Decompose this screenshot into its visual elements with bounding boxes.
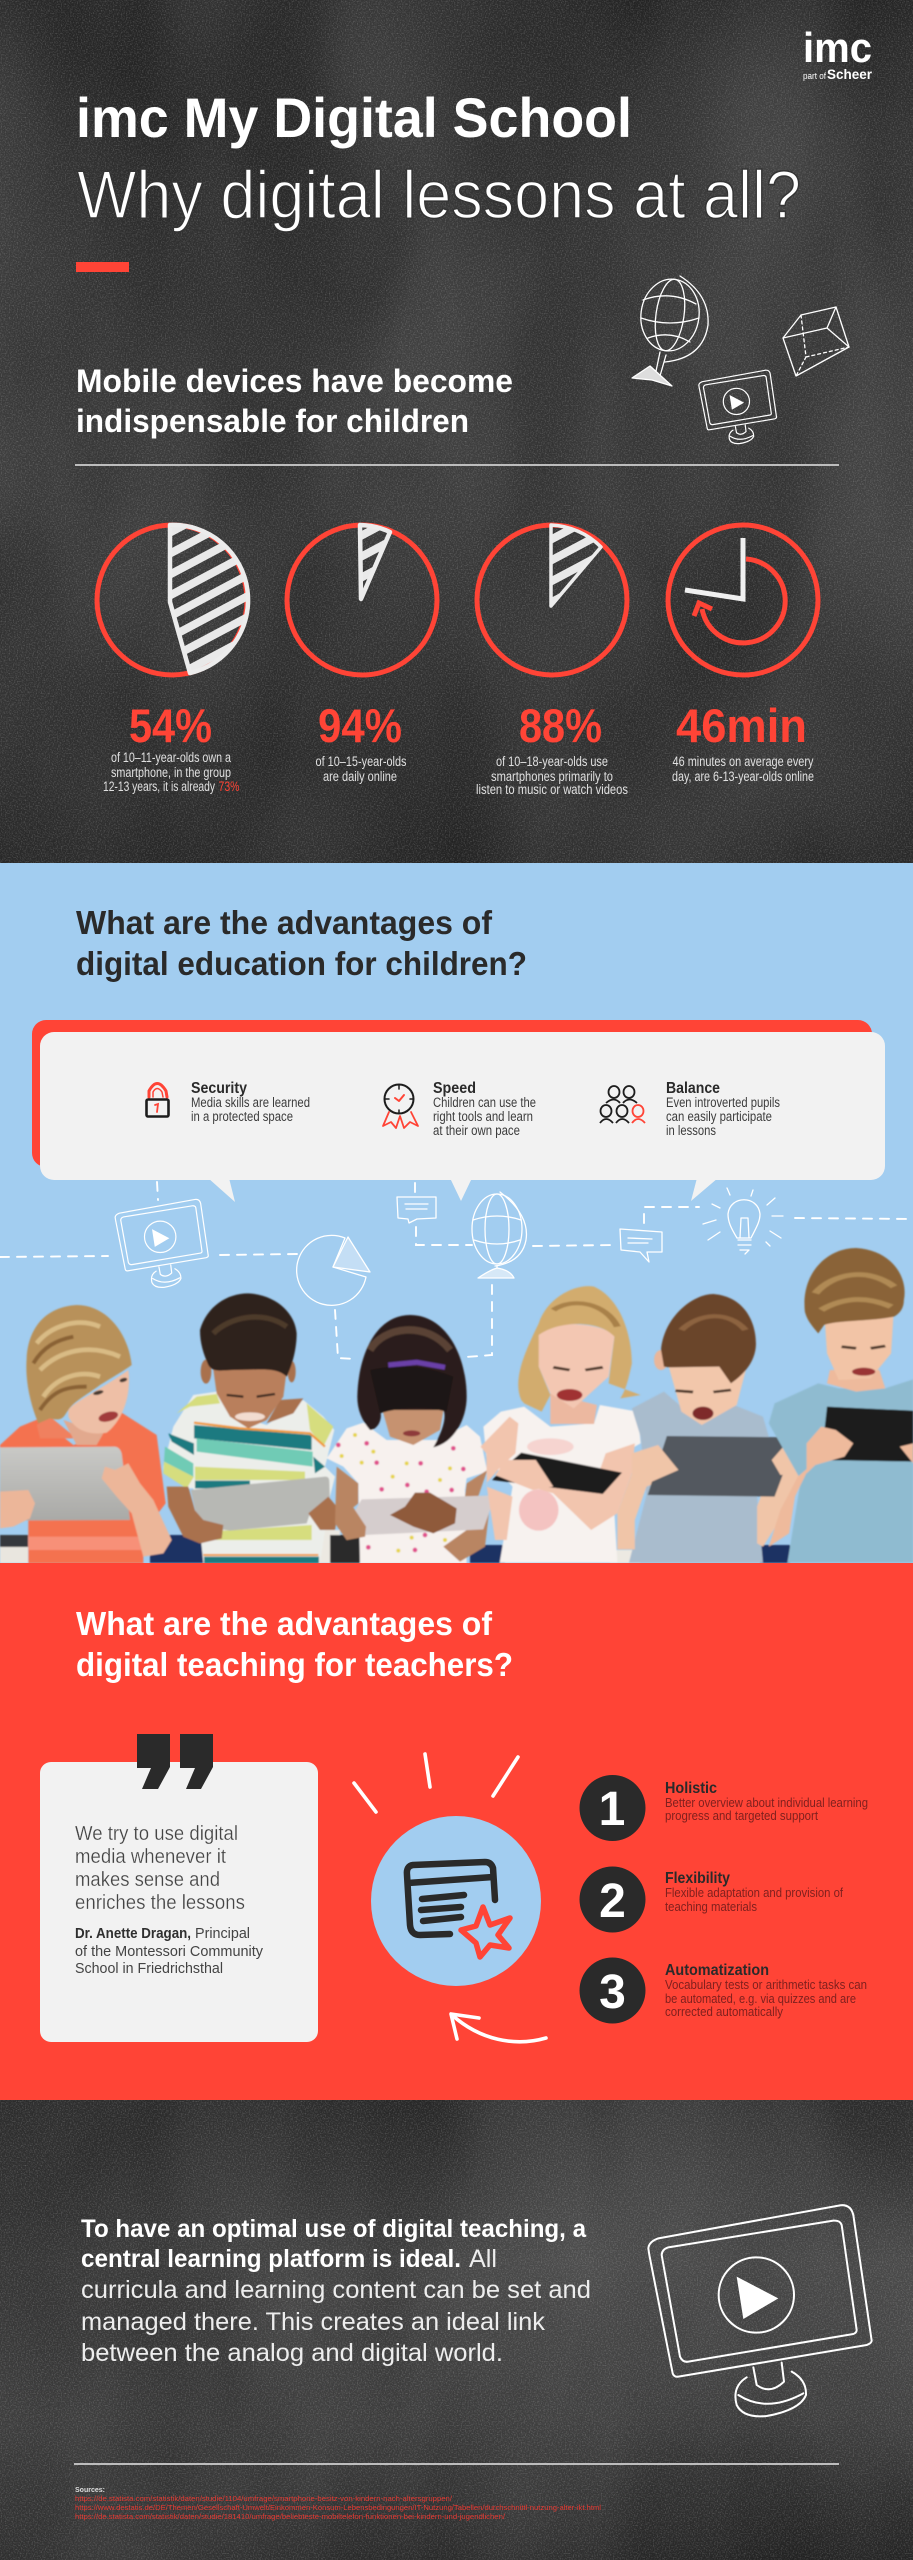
text: quote: We try to use digital: [75, 1823, 238, 1845]
item: automatization: be automated, e.g. via quizzes and are: [665, 1992, 856, 2006]
stat: 94%: are daily online: [323, 769, 397, 784]
icon: chalk monitor with play button: [699, 370, 777, 444]
arrow: curved chalk arrow: [451, 2014, 546, 2042]
icon: large chalk monitor: [648, 2205, 872, 2416]
illustration: benches behind the children: [0, 1530, 790, 1563]
text: balance: [666, 1080, 780, 1138]
stat: 54%: 12-13 years, it is already: [103, 779, 215, 794]
icon: clock 46 minutes: [668, 525, 818, 675]
title: imc My Digital School: [76, 86, 632, 149]
item: flexibility: Flexibility: [665, 1870, 730, 1887]
text: quote author: School in Friedrichsthal: [75, 1961, 223, 1977]
panel: chalkboard header and statistics: [0, 0, 913, 863]
stat: 88%: smartphones primarily to: [491, 769, 613, 784]
illustration: children one to three: [0, 1293, 495, 1563]
text: quote author: [75, 1926, 264, 1977]
heading: advantages for teachers: What are the advantages of: [76, 1605, 493, 1642]
text: speed: right tools and learn: [433, 1109, 533, 1124]
title: [76, 86, 801, 233]
text: learning platform statement: All: [469, 2245, 497, 2273]
stat: 54%: smartphone, in the group: [111, 765, 231, 780]
icon: doodle chat bubble left: [397, 1197, 436, 1223]
text: quote: media whenever it: [75, 1846, 226, 1868]
text: speed: Speed: [433, 1080, 476, 1097]
panel: advantages for teachers: [0, 1563, 913, 2100]
icon: chalk cube: [783, 307, 849, 376]
text: security: in a protected space: [191, 1109, 293, 1124]
item: holistic: Better overview about individual learning: [665, 1796, 868, 1810]
stat: 94%: 94%: [318, 699, 402, 752]
illustration: child six: [769, 1248, 913, 1563]
item: flexibility: Flexible adaptation and provision of: [665, 1886, 843, 1900]
logo: imc part of Scheer: imc: [803, 24, 872, 71]
illustration: children four to six: [480, 1248, 913, 1563]
item: automatization: Vocabulary tests or arithmetic tasks can: [665, 1978, 867, 1992]
item: flexibility: [580, 1866, 843, 1932]
text: sources: [75, 2485, 601, 2521]
chart: 54% pie: [97, 525, 248, 675]
text: balance: Balance: [666, 1080, 720, 1097]
stat: 88%: 88%: [519, 699, 602, 752]
text: balance: in lessons: [666, 1123, 716, 1138]
heading: advantages for children: [76, 904, 527, 982]
stat: 88%: [476, 699, 628, 797]
text: sources: Sources:: [75, 2485, 105, 2494]
stat: 46min: [672, 699, 814, 784]
chart: 94% pie: [287, 525, 437, 675]
text: sources: https://www.destatis.de/DE/Themen/Gesellschaft-Umwelt/Einkommen-Konsum-Lebensbedingungen/IT-Nutzung/Tabellen/durchschnittl-nutzung-alter-ikt.html: [75, 2503, 601, 2512]
text: quote: enriches the lessons: [75, 1892, 245, 1914]
item: automatization: [580, 1958, 867, 2024]
item: flexibility: 2: [599, 1875, 626, 1928]
text: security: Media skills are learned: [191, 1095, 310, 1110]
heading: advantages for teachers: [76, 1605, 513, 1683]
text: learning platform statement: [81, 2215, 591, 2367]
item: flexibility: teaching materials: [665, 1900, 757, 1914]
text: balance: Even introverted pupils: [666, 1095, 780, 1110]
stat: 54%: of 10–11-year-olds own a: [111, 750, 231, 765]
text: quote: makes sense and: [75, 1869, 220, 1891]
icon: doodle monitor: [115, 1199, 208, 1287]
icon: chalk globe: [632, 275, 708, 386]
logo: imc part of Scheer: part of: [803, 71, 826, 81]
text: quote author: Principal: [195, 1926, 250, 1942]
text: quote: [75, 1823, 245, 1914]
icon: medal stopwatch: [383, 1084, 418, 1128]
text: speed: Children can use the: [433, 1095, 536, 1110]
heading: advantages for children: What are the advantages of: [76, 904, 493, 941]
illustration: blue circle with browser and star: [371, 1816, 541, 1986]
stat: 94%: of 10–15-year-olds: [316, 754, 407, 769]
text: learning platform statement: curricula and learning content can be set and: [81, 2276, 591, 2304]
illustration: child one: [0, 1305, 172, 1563]
icon: padlock: [146, 1084, 168, 1116]
item: holistic: 1: [599, 1783, 625, 1836]
heading: advantages for children: digital education for children?: [76, 945, 527, 982]
text: speed: [433, 1080, 536, 1138]
item: automatization: 3: [599, 1966, 626, 2019]
divider: [75, 464, 839, 466]
chart: 88% pie: [477, 525, 627, 675]
item: holistic: Holistic: [665, 1780, 717, 1797]
heading: advantages for teachers: digital teaching for teachers?: [76, 1646, 513, 1683]
illustration: six children with tablets: [0, 1248, 913, 1563]
icon: doodle globe: [472, 1192, 526, 1278]
heading: mobile devices: Mobile devices have become: [76, 363, 513, 399]
logo: imc part of Scheer: Scheer: [827, 66, 873, 82]
text: quote author: of the Montessori Community: [75, 1944, 264, 1960]
stat: 54%: 73%: [218, 779, 240, 794]
divider: [74, 2463, 839, 2465]
text: learning platform statement: managed there. This creates an ideal link: [81, 2308, 545, 2336]
icon: doodle pie chart: [297, 1235, 370, 1305]
title: Why digital lessons at all?: [77, 157, 801, 233]
text: quote author: Dr. Anette Dragan,: [75, 1926, 191, 1942]
stat: 94%: [316, 699, 407, 784]
stat: 46min: 46 minutes on average every: [672, 754, 814, 769]
illustration: child four: [480, 1286, 641, 1563]
icon: doodle light bulb: [703, 1188, 783, 1254]
text: security: Security: [191, 1080, 247, 1097]
illustration: child three: [327, 1315, 495, 1563]
stat: 54%: 54%: [129, 699, 212, 752]
doodle: dashed connector lines: [0, 1182, 913, 1359]
icon: quotation marks: [137, 1734, 213, 1789]
text: speed: at their own pace: [433, 1123, 520, 1138]
illustration: child two: [163, 1293, 338, 1563]
callout: advantages speech bubble: [32, 1020, 885, 1202]
stat: 88%: of 10–18-year-olds use: [496, 754, 608, 769]
panel: quote card: [40, 1734, 318, 2042]
text: sources: https://de.statista.com/statistik/daten/studie/1104/umfrage/smartphone-besitz-von-kindern-nach-altersgruppen/: [75, 2494, 453, 2503]
stat: 88%: listen to music or watch videos: [476, 782, 628, 797]
panel: chalkboard conclusion: [0, 2100, 913, 2560]
heading: mobile devices: indispensable for children: [76, 403, 469, 439]
text: sources: https://de.statista.com/statistik/daten/studie/181410/umfrage/beliebteste-mobiltelefon-funktionen-bei-kindern-und-jugendlichen/: [75, 2512, 506, 2521]
red accent bar: [76, 262, 129, 272]
item: automatization: corrected automatically: [665, 2005, 784, 2019]
icon: group of people: [600, 1086, 645, 1123]
text: learning platform statement: To have an optimal use of digital teaching, a: [81, 2215, 587, 2243]
text: learning platform statement: central learning platform is ideal.: [81, 2245, 461, 2273]
item: holistic: [580, 1775, 868, 1841]
text: balance: can easily participate: [666, 1109, 772, 1124]
text: learning platform statement: between the analog and digital world.: [81, 2339, 503, 2367]
icon: doodle chat bubble right: [620, 1229, 662, 1262]
text: security: [191, 1080, 310, 1124]
item: automatization: Automatization: [665, 1962, 769, 1979]
illustration: child five: [617, 1294, 810, 1563]
stat: 46min: 46min: [676, 699, 807, 752]
panel: advantages for children: [0, 863, 913, 1563]
stat: 54%: [103, 699, 240, 794]
stat: 46min: day, are 6-13-year-olds online: [672, 769, 814, 784]
heading: mobile devices: [76, 363, 513, 439]
illustration: chalk rays: [354, 1754, 518, 1812]
item: holistic: progress and targeted support: [665, 1809, 818, 1823]
